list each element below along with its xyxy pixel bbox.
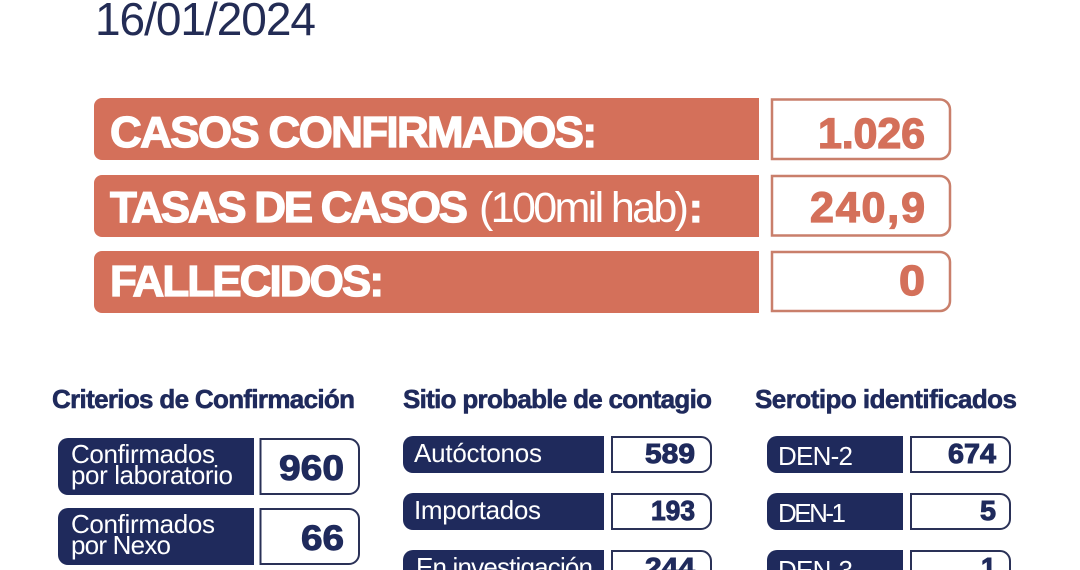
row: confirmed by laboratory bbox=[58, 438, 359, 495]
confirmed cases value box: 1.026 bbox=[818, 110, 925, 158]
panel: probable site of infection bbox=[403, 384, 712, 570]
confirmed cases label bar bbox=[94, 98, 759, 160]
deaths label bar bbox=[94, 251, 759, 313]
row: confirmed by link bbox=[58, 508, 359, 565]
panel: confirmation criteria bbox=[52, 384, 359, 565]
row: confirmed by link: Confirmados bbox=[71, 509, 215, 539]
confirmed cases value box bbox=[772, 100, 950, 159]
confirmed cases label bar: CASOS CONFIRMADOS: bbox=[110, 108, 597, 157]
panel: identified serotypes bbox=[755, 384, 1017, 570]
row: imported cases: 193 bbox=[651, 495, 695, 526]
row: under investigation bbox=[403, 550, 711, 570]
row: DEN-1: DEN-1 bbox=[778, 498, 846, 528]
panel: case rate row bbox=[94, 175, 950, 237]
serotypes heading: Serotipo identificados bbox=[755, 384, 1017, 414]
row: confirmed by laboratory: Confirmados bbox=[71, 439, 215, 469]
row: DEN-2: DEN-2 bbox=[778, 441, 853, 471]
case rate value box bbox=[772, 176, 950, 236]
deaths value box bbox=[772, 252, 950, 311]
panel: confirmed cases row bbox=[94, 98, 950, 160]
row: DEN-1 bbox=[767, 493, 1010, 530]
case rate label bar bbox=[94, 175, 759, 237]
row: confirmed by laboratory: 960 bbox=[279, 449, 344, 488]
row: DEN-3 bbox=[767, 550, 1010, 570]
deaths label bar: FALLECIDOS: bbox=[110, 257, 384, 306]
row: local cases bbox=[403, 436, 711, 473]
deaths value box: 0 bbox=[899, 257, 925, 305]
case rate label bar: TASAS DE CASOS bbox=[110, 183, 468, 232]
row: imported cases: Importados bbox=[414, 495, 541, 525]
row: imported cases bbox=[403, 493, 711, 530]
row: confirmed by link: 66 bbox=[301, 519, 344, 558]
row: DEN-2 bbox=[767, 436, 1010, 473]
panel: deaths row bbox=[94, 251, 950, 313]
row: DEN-1: 5 bbox=[980, 495, 996, 526]
case rate label bar: : bbox=[689, 185, 703, 231]
row: local cases: 589 bbox=[645, 438, 695, 469]
site of infection heading: Sitio probable de contagio bbox=[403, 384, 712, 414]
case rate value box: 240,9 bbox=[810, 184, 925, 232]
row: local cases: Autóctonos bbox=[414, 438, 542, 468]
case rate label bar: (100mil hab) bbox=[479, 184, 689, 232]
row: DEN-2: 674 bbox=[948, 438, 996, 469]
confirmation criteria heading: Criterios de Confirmación bbox=[52, 384, 355, 414]
row: confirmed by link: por Nexo bbox=[71, 530, 171, 560]
row: confirmed by laboratory: por laboratorio bbox=[71, 460, 233, 490]
